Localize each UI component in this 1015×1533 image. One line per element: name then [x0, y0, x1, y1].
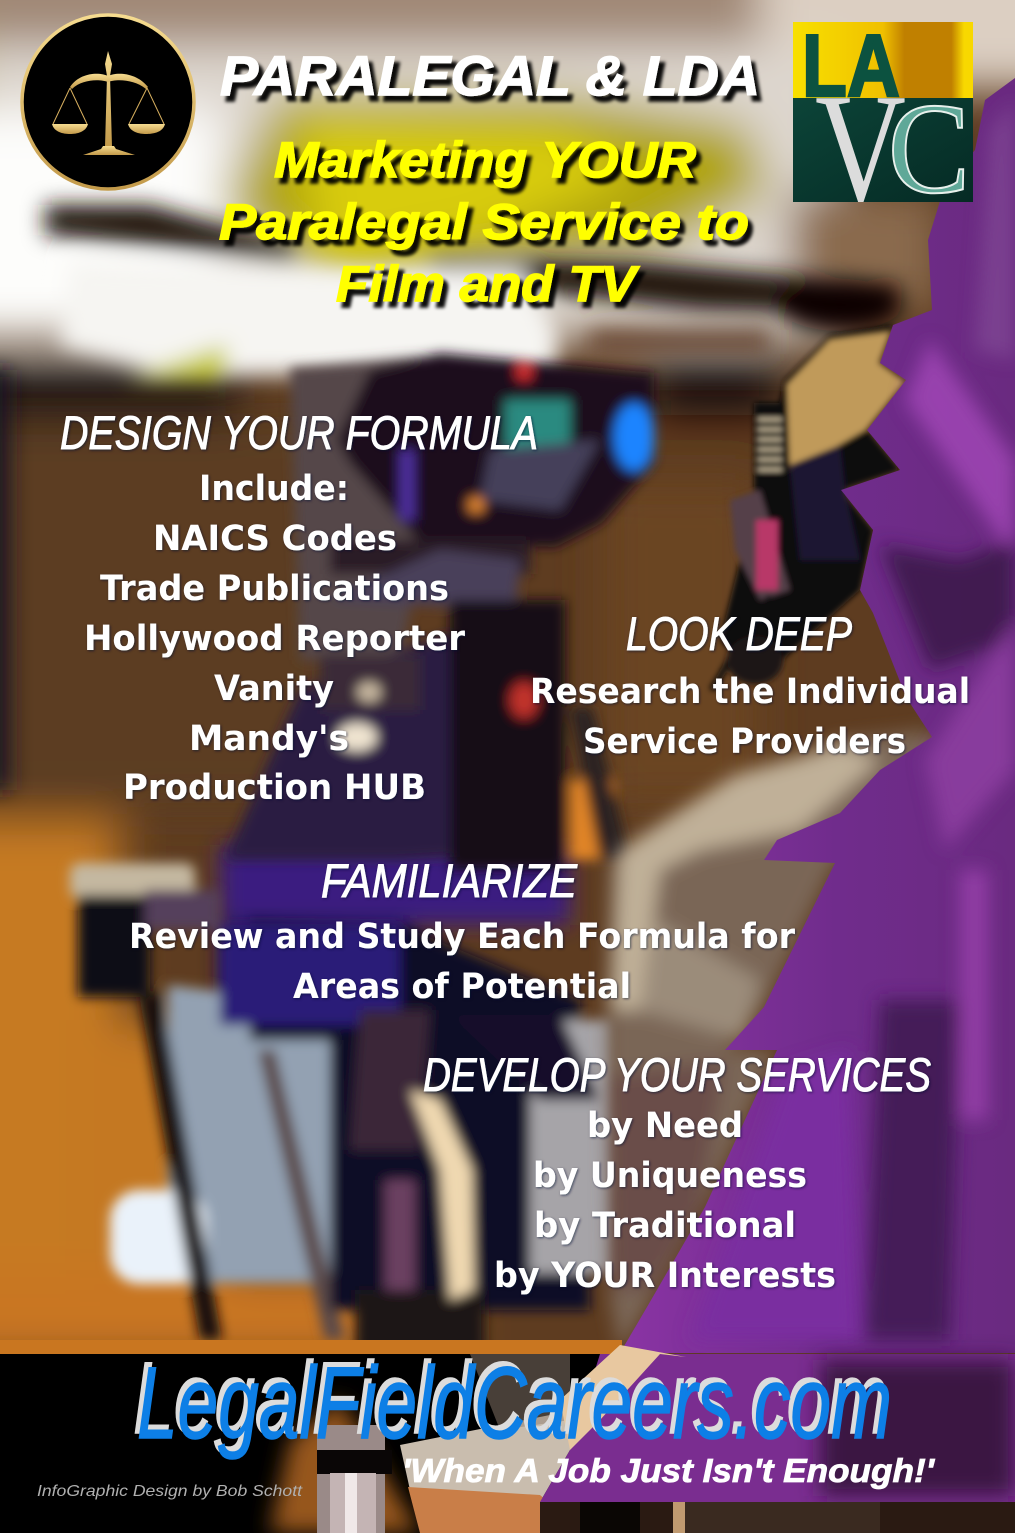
logo: LAVC: LA — [802, 16, 900, 115]
camera box — [337, 353, 654, 547]
subtitle: Marketing YOUR — [274, 132, 696, 188]
logo: LAVC: C — [888, 77, 970, 221]
logo: LAVC: V — [815, 60, 906, 238]
subtitle: Paralegal Service to — [219, 194, 749, 250]
section: look deep — [530, 607, 970, 762]
section: develop your services: by YOUR Interests — [494, 1256, 836, 1296]
logo: LAVC — [793, 22, 973, 202]
grey side of camera — [290, 355, 440, 660]
subtitle — [219, 132, 749, 312]
section: look deep: Service Providers — [583, 722, 906, 762]
section: design your formula: Hollywood Reporter — [84, 619, 466, 659]
bottom black band — [0, 1340, 1015, 1533]
tripod top left — [70, 863, 195, 899]
title: PARALEGAL & LDA — [220, 44, 760, 107]
section: design your formula: DESIGN YOUR FORMULA — [60, 406, 538, 459]
hair and face of operator — [720, 325, 906, 680]
section: look deep: Research the Individual — [530, 672, 970, 712]
subtitle: Film and TV — [336, 256, 640, 312]
section: design your formula: Vanity — [214, 669, 334, 709]
logo: scales of justice badge — [22, 15, 194, 189]
section: design your formula: NAICS Codes — [153, 519, 397, 559]
camera centre column — [250, 920, 590, 1310]
section: familiarize: Areas of Potential — [293, 967, 631, 1007]
section: look deep: LOOK DEEP — [626, 607, 853, 660]
section: design your formula: Mandy's — [189, 719, 349, 759]
section: design your formula: Production HUB — [123, 768, 426, 808]
icon: balance scale — [52, 51, 165, 155]
section: develop your services: by Uniqueness — [533, 1156, 807, 1196]
blue-grey panel — [168, 985, 362, 1283]
section: design your formula — [60, 406, 538, 808]
tagline: 'When A Job Just Isn't Enough!' — [402, 1452, 935, 1489]
section: design your formula: Trade Publications — [100, 569, 449, 609]
section: familiarize: Review and Study Each Formula for — [129, 917, 796, 957]
lower camera body — [225, 600, 565, 860]
purple figure — [620, 78, 1015, 1353]
section: design your formula: Include: — [199, 469, 349, 509]
section: familiarize: FAMILIARIZE — [321, 854, 578, 907]
credit: InfoGraphic Design by Bob Schott — [37, 1483, 303, 1500]
section: develop your services — [423, 1048, 931, 1296]
section: develop your services: by Need — [587, 1106, 743, 1146]
section: develop your services: by Traditional — [534, 1206, 796, 1246]
section: familiarize — [129, 854, 796, 1007]
shirt — [607, 730, 950, 1353]
